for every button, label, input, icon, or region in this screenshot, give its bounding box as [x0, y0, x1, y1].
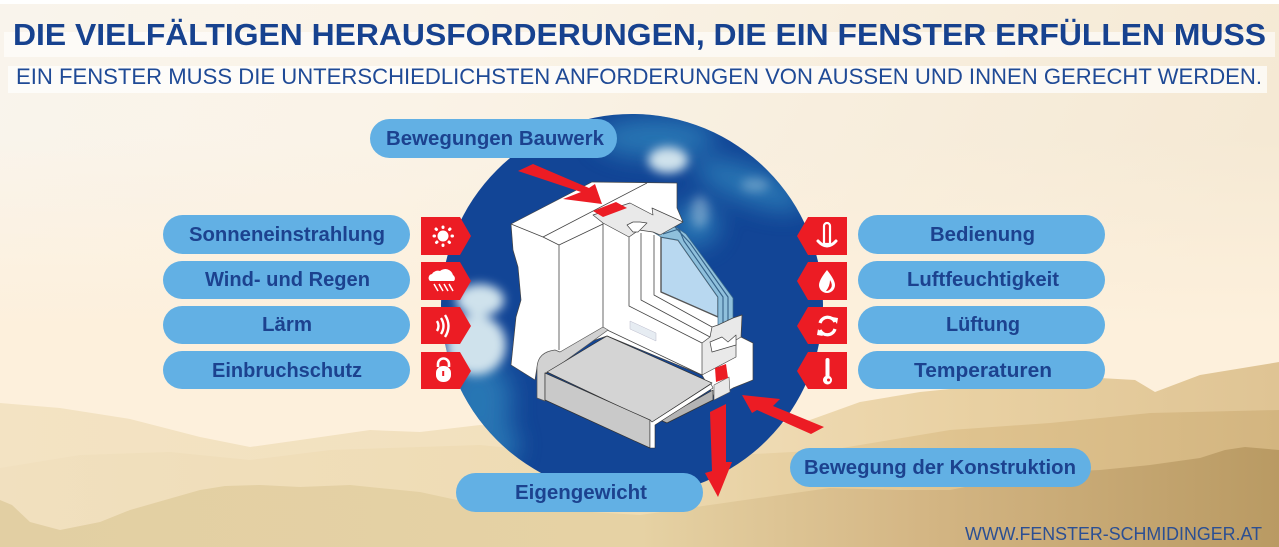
pill: Wind- und Regen — [163, 261, 410, 299]
icon: sound waves — [421, 307, 471, 344]
pill: Bewegungen Bauwerk: Bewegungen Bauwerk — [386, 128, 605, 150]
pill: Bedienung — [858, 215, 1105, 254]
sill end return — [537, 327, 608, 401]
sky circle with clouds — [441, 114, 823, 484]
title band — [4, 32, 1275, 57]
pill: Wind- und Regen: Wind- und Regen — [205, 269, 370, 291]
pill: Bedienung: Bedienung — [930, 224, 1035, 246]
frame edges — [511, 183, 712, 375]
pill: Sonneneinstrahlung: Sonneneinstrahlung — [189, 224, 385, 246]
sill top face — [547, 336, 712, 422]
top section notch — [627, 222, 647, 232]
top frame section — [593, 203, 683, 237]
window cross-section illustration — [511, 182, 753, 448]
glazing stripes — [653, 223, 733, 326]
red marker top — [593, 202, 627, 217]
pill: Lärm: Lärm — [262, 314, 312, 336]
icon: thermometer — [797, 352, 847, 389]
icon: sun — [421, 217, 471, 255]
sill lip — [650, 384, 713, 448]
red marker bottom — [715, 364, 728, 382]
bottom frame section — [702, 315, 742, 375]
icon: rain cloud — [421, 262, 471, 300]
pill: Luftfeuchtigkeit — [858, 261, 1105, 299]
pill: Lärm — [163, 306, 410, 344]
icon: handle — [797, 217, 847, 255]
subtitle band — [8, 66, 1267, 93]
bottom section notch — [710, 335, 736, 352]
arrow: top — [518, 164, 602, 204]
website url: WWW.FENSTER-SCHMIDINGER.AT — [965, 523, 1262, 544]
icon: ventilation arrows — [797, 307, 847, 344]
pill: Sonneneinstrahlung — [163, 215, 410, 254]
pill: Luftfeuchtigkeit: Luftfeuchtigkeit — [907, 269, 1059, 291]
pill: Lüftung: Lüftung — [946, 314, 1020, 336]
lower profile column — [714, 377, 730, 400]
pill: Einbruchschutz: Einbruchschutz — [212, 360, 362, 382]
icon: water drop — [797, 262, 847, 300]
subtitle: EIN FENSTER MUSS DIE UNTERSCHIEDLICHSTEN ANFORDERUNGEN VON AUSSEN UND INNEN GERECHT WERDEN. — [16, 64, 1262, 89]
pill: Eigengewicht: Eigengewicht — [515, 482, 647, 504]
icon: padlock — [421, 352, 471, 389]
sill front face — [545, 373, 650, 448]
label plate — [630, 321, 656, 341]
pill: Temperaturen: Temperaturen — [914, 360, 1052, 382]
pill: Einbruchschutz — [163, 351, 410, 389]
glass pane — [661, 237, 718, 317]
pill: Temperaturen — [858, 351, 1105, 389]
sill underside — [660, 390, 713, 423]
pill: Bewegung der Konstruktion: Bewegung der Konstruktion — [804, 457, 1076, 479]
arrow: down — [705, 404, 732, 497]
pill: Lüftung — [858, 306, 1105, 344]
title: DIE VIELFÄLTIGEN HERAUSFORDERUNGEN, DIE EIN FENSTER ERFÜLLEN MUSS — [13, 17, 1266, 52]
arrow: right — [742, 395, 824, 434]
pill: Bewegung der Konstruktion — [790, 448, 1091, 487]
pill: Bewegungen Bauwerk — [370, 119, 617, 158]
pill: Eigengewicht — [456, 473, 703, 512]
wall and frame body — [511, 182, 753, 398]
